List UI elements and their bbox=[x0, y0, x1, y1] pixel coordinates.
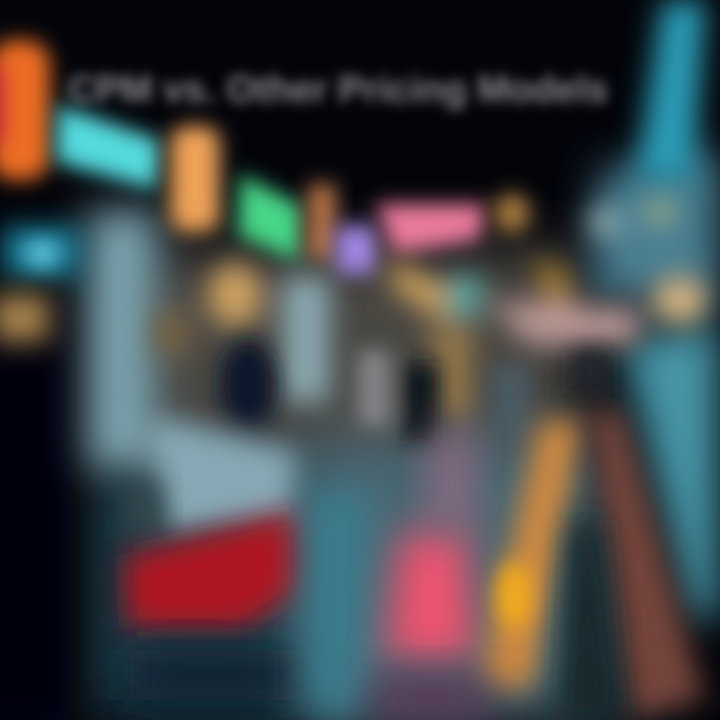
icon: green sign bbox=[238, 174, 302, 262]
icon: amber left sign bbox=[0, 294, 50, 342]
icon: dark strip bbox=[560, 520, 620, 720]
panel: pale blue torso bbox=[140, 420, 298, 535]
scene: mid signs and lights bbox=[156, 199, 708, 418]
icon: cyan left sign bbox=[4, 228, 80, 276]
icon: orange reflection bbox=[480, 420, 582, 690]
icon: yellow reflection bbox=[496, 561, 532, 629]
icon: amber sign bbox=[494, 193, 530, 233]
scene: floor reflections bbox=[305, 410, 705, 720]
title: CPM vs. Other Pricing Models bbox=[68, 69, 608, 111]
scene: people silhouettes bbox=[220, 339, 606, 450]
scene: street floor and walls bbox=[90, 250, 640, 720]
scene: foreground figure with red box bbox=[124, 420, 300, 700]
icon: dark shape left of box bbox=[125, 480, 161, 540]
icon: violet sign bbox=[336, 226, 376, 274]
scene: neon signs bbox=[0, 40, 530, 342]
icon: brown reflection bbox=[590, 410, 705, 720]
icon: pink reflection bbox=[384, 525, 478, 660]
icon: red orange sign bbox=[0, 40, 50, 180]
icon: dark shadow under box bbox=[130, 650, 300, 700]
icon: orange sign bbox=[170, 126, 220, 232]
icon: cyan sign bbox=[56, 105, 160, 190]
icon: blue reflection bbox=[305, 490, 370, 720]
panel: right teal wall bbox=[590, 150, 720, 620]
icon: pink sign bbox=[376, 204, 486, 254]
icon: teal neon stripe top right bbox=[636, 0, 706, 180]
panel: left dark column bbox=[0, 300, 70, 720]
icon: dim violet floor bbox=[370, 675, 490, 720]
icon: red box bbox=[124, 510, 300, 628]
icon: orange small sign bbox=[308, 184, 336, 260]
panel: left pale column bbox=[86, 210, 158, 470]
